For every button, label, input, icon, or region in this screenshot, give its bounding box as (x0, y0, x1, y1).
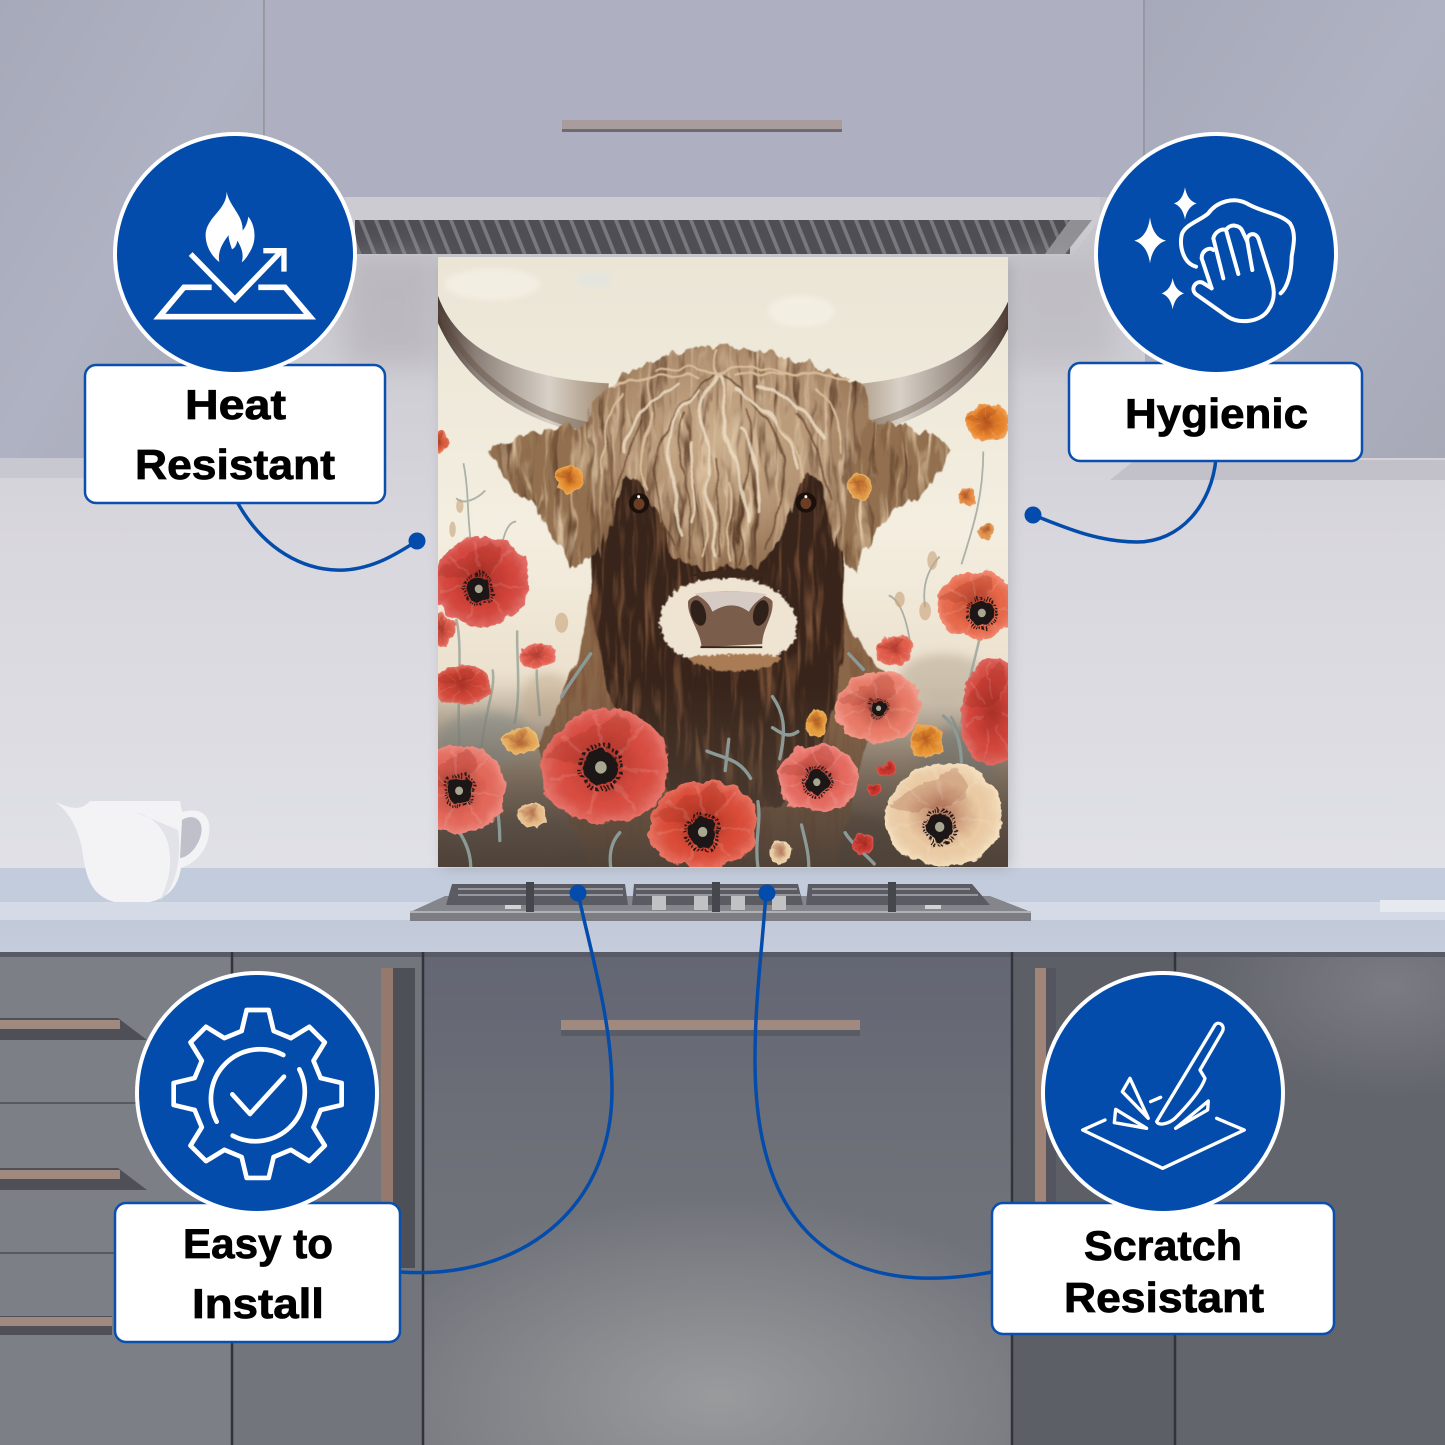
icon: knife scratching surface (1083, 1023, 1244, 1168)
countertop (0, 902, 1445, 952)
badge circle (137, 973, 377, 1213)
icon: hand wiping with sparkles (1134, 187, 1294, 321)
wall (0, 0, 1445, 900)
icon: gear with check mark (174, 1010, 342, 1178)
right ear fur (829, 421, 949, 572)
poppy top left (433, 537, 529, 626)
poppy right edge (960, 659, 1024, 765)
left horn (438, 296, 609, 434)
connector: hygienic (1024, 458, 1216, 542)
connector: easy to install (400, 884, 612, 1273)
right horn (842, 302, 1008, 432)
range hood (345, 197, 1100, 256)
upper left cabinet (0, 0, 264, 458)
dark neck and face (590, 432, 849, 806)
callout: hygienic (1069, 134, 1362, 461)
badge circle (1096, 134, 1336, 374)
poppies (411, 403, 1024, 869)
cabinet handle (562, 120, 842, 129)
muzzle (660, 578, 797, 671)
orange flowers (965, 403, 1009, 441)
panel: highland cow poppy artwork (438, 257, 1008, 867)
heading: heat resistant: Heat (185, 381, 286, 428)
icon: flame on surface with arrow (159, 192, 310, 317)
chin (688, 654, 782, 671)
callout: easy to install: Install (192, 1280, 324, 1327)
distant stems and leaves (456, 452, 983, 771)
upper left ledge (0, 458, 264, 478)
foreground sprigs (460, 654, 961, 867)
hood vent (355, 220, 1070, 254)
poppy right of muzzle (835, 672, 921, 743)
gas hob (410, 882, 1031, 921)
centre door handle (561, 1020, 860, 1030)
badge circle (1043, 973, 1283, 1213)
heading: hygienic: Hygienic (1125, 390, 1308, 437)
drawer handles (0, 1018, 147, 1335)
poppy lower middle (778, 745, 858, 812)
left ear fur (493, 422, 612, 568)
connector: heat resistant (235, 498, 426, 570)
poppy large centre left (541, 709, 668, 824)
callout: heat resistant (85, 134, 385, 503)
label box (85, 365, 385, 503)
label box (115, 1203, 400, 1342)
poppy upper right (937, 571, 1015, 639)
teapot (55, 801, 209, 904)
hair tuft shadow over muzzle (689, 570, 772, 578)
meadow blotches (438, 654, 998, 868)
small poppies (519, 643, 555, 668)
upper right ledge (1110, 460, 1445, 480)
fringe strands (603, 350, 849, 564)
callout: heat resistant: Resistant (135, 441, 335, 488)
lower cabinets (0, 952, 1445, 1445)
badge circle (115, 134, 355, 374)
label box (992, 1203, 1334, 1334)
upper right cabinet (1145, 0, 1445, 458)
painting sky and meadow (438, 257, 1008, 867)
callout: scratch resistant (992, 973, 1334, 1334)
cow body (536, 592, 896, 867)
fringe hair (588, 343, 866, 570)
poppy seed centres (455, 585, 986, 837)
vertical door handles (381, 968, 1056, 1268)
poppy far left (411, 745, 505, 834)
heading: scratch resistant: Scratch (1084, 1222, 1242, 1269)
nose (688, 591, 773, 647)
artwork shadow (442, 262, 1010, 868)
connector: scratch resistant (755, 884, 992, 1278)
counter backsplash strip (0, 868, 1445, 902)
lower cabinet glow (424, 1120, 1012, 1445)
poppy bottom centre (649, 781, 758, 869)
meadow darkening (438, 685, 1008, 867)
callout: scratch resistant: Resistant (1064, 1274, 1264, 1321)
eyes (629, 492, 816, 513)
wall shadow under hood (345, 256, 440, 366)
cream poppy (884, 764, 1001, 866)
upper centre cabinet (265, 0, 1145, 197)
heading: easy to install: Easy to (183, 1220, 333, 1267)
callout: easy to install (115, 973, 400, 1342)
label box (1069, 363, 1362, 461)
